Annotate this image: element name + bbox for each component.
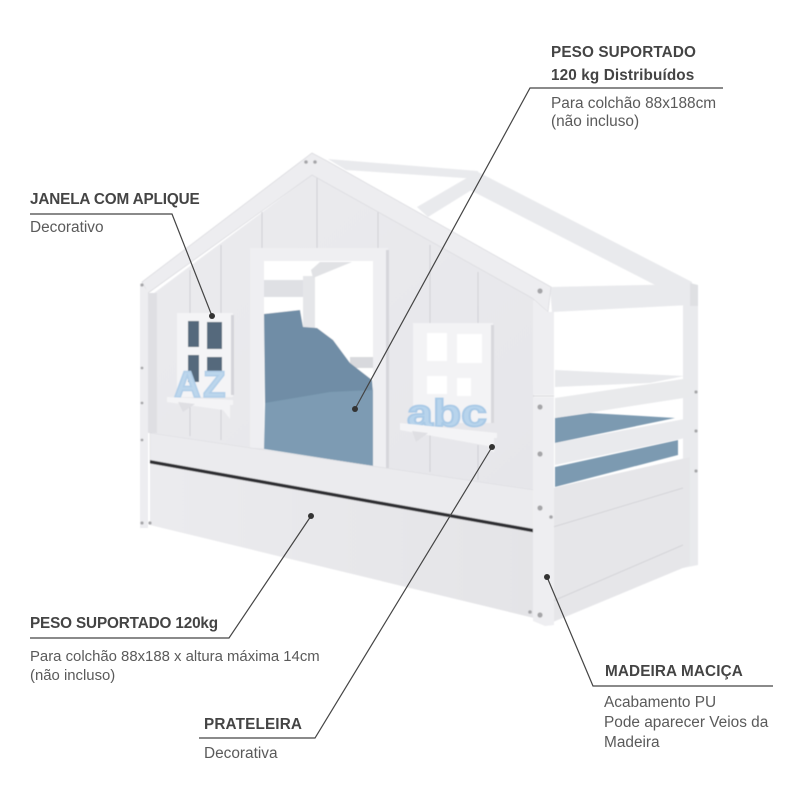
description line 2: Pode aparecer Veios da (604, 714, 769, 731)
description: Decorativo (30, 219, 104, 236)
description line 3: Madeira (604, 734, 660, 751)
description line 2: (não incluso) (551, 113, 639, 130)
left window: Z (203, 364, 226, 405)
leader line (199, 447, 492, 738)
callout: peso suportado colchão (352, 44, 723, 412)
mattress (264, 390, 373, 466)
callout: prateleira (199, 444, 495, 762)
front roof (142, 153, 551, 312)
callout: peso suportado bicama (30, 513, 320, 684)
description: Decorativa (204, 745, 278, 762)
letters A Z: A (174, 364, 201, 405)
marker dot (308, 513, 314, 519)
letters abc: abc (407, 393, 487, 435)
front right post (533, 300, 554, 626)
description: Para colchão 88x188 x altura máxima 14cm (30, 649, 320, 665)
description line 2: (não incluso) (30, 668, 115, 684)
callout: madeira maciça (544, 574, 773, 751)
drawer gap (150, 460, 534, 532)
shelf (400, 423, 497, 453)
marker dot (352, 406, 358, 412)
heading: JANELA COM APLIQUE (30, 191, 200, 208)
heading: MADEIRA MACIÇA (605, 663, 743, 680)
description: Para colchão 88x188cm (551, 95, 716, 112)
heading: PESO SUPORTADO (551, 44, 696, 61)
leader line (30, 516, 311, 638)
subheading: 120 kg Distribuídos (551, 67, 694, 84)
bed illustration (140, 153, 698, 626)
left window (167, 313, 234, 419)
shelf (167, 397, 233, 419)
heading: PRATELEIRA (204, 716, 302, 733)
rear roof frame (328, 159, 698, 568)
left post (140, 283, 148, 528)
right window (400, 323, 497, 453)
bottom rail (150, 433, 534, 531)
side rails and mattress (553, 370, 690, 622)
trundle drawer (150, 462, 534, 618)
callout: janela com aplique (30, 191, 215, 319)
pillow and duvet (264, 310, 373, 405)
wall plank lines (190, 178, 478, 480)
heading: PESO SUPORTADO 120kg (30, 615, 218, 632)
leader line (355, 88, 723, 409)
leader line (30, 214, 212, 316)
leader line (547, 577, 773, 686)
door frame (250, 248, 389, 468)
front wall (150, 175, 534, 490)
post shadow strip (148, 293, 157, 433)
description: Acabamento PU (604, 694, 716, 711)
marker dot (209, 313, 215, 319)
marker dot (489, 444, 495, 450)
door opening (264, 261, 373, 466)
marker dot (544, 574, 550, 580)
screws (140, 160, 698, 618)
